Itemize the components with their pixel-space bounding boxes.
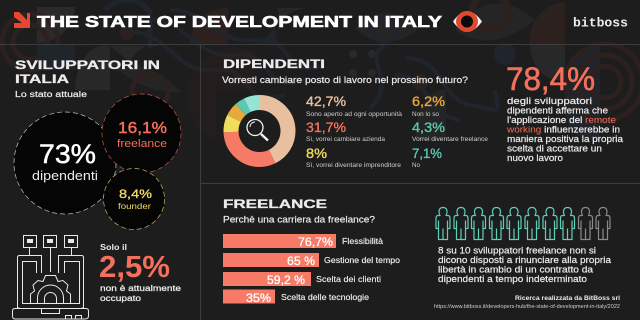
stat: 78,4%: 78,4% — [506, 61, 595, 97]
legend: 42,7% — [306, 93, 403, 118]
legend: 4,3%: 4,3% — [412, 119, 445, 135]
circle: dipendenti 73%: dipendenti — [32, 169, 98, 183]
heading: sviluppatori — [15, 58, 160, 86]
legend: 4,3%: Vorrei diventare freelance — [412, 137, 489, 143]
stat: 2,5% non occupato: occupato — [100, 293, 141, 303]
legend: 31,7%: Sì, vorrei cambiare azienda — [306, 137, 386, 143]
bar: scelta delle tecnologie: 35% — [246, 291, 271, 305]
text block: remote working: l'applicazione del remote — [507, 115, 616, 126]
bar: scelta dei clienti — [223, 272, 381, 287]
bar: gestione del tempo: 65 % — [287, 254, 315, 268]
bar: gestione del tempo: Gestione del tempo — [324, 255, 400, 265]
bar: scelta dei clienti: Scelta dei clienti — [316, 274, 381, 284]
question: Vorresti cambiare posto di lavoro nel prossimo futuro? — [222, 75, 468, 86]
text block: remote working: working influenzerebbe in — [506, 124, 620, 136]
stat: 2,5% non occupato: 2,5% — [99, 249, 170, 284]
legend: 4,3% — [412, 119, 489, 143]
circle: dipendenti 73% — [14, 112, 116, 214]
text block: 8 su 10 — [438, 246, 612, 285]
title: THE STATE OF DEVELOPMENT IN ITALY — [37, 14, 443, 31]
text block: remote working: scelta di accettare un — [507, 144, 602, 154]
subheading: Lo stato attuale — [15, 90, 88, 99]
circle: founder 8,4%: founder — [118, 201, 151, 211]
credit: https://www.bitboss.it/developers-hub/the-state-of-development-in-italy/2022 — [434, 304, 620, 310]
bar: flessibilità: 76,7% — [298, 235, 333, 249]
circle: freelance 16,1% — [102, 94, 181, 173]
text block: 8 su 10: 8 su 10 sviluppatori freelance non si — [438, 246, 596, 257]
legend: 8%: Sì, vorrei diventare imprenditore — [306, 163, 402, 169]
legend: 8%: 8% — [306, 145, 327, 161]
bar chart — [223, 234, 400, 305]
pictogram: 8 su 10 — [436, 208, 610, 240]
panel: freelance — [223, 197, 620, 310]
icon: laptop with gear — [12, 236, 88, 319]
bar: flessibilità — [223, 234, 383, 249]
panel: dipendenti — [222, 57, 624, 169]
heading: dipendenti: DIPENDENTI — [223, 57, 325, 71]
background pattern — [2, 0, 640, 140]
stat: 2,5% non occupato: non è attualmente — [100, 283, 181, 293]
heading: freelance: FREELANCE — [223, 197, 327, 211]
circle: founder 8,4% — [104, 168, 164, 230]
legend: 6,2% — [412, 93, 445, 118]
icon: magnifier — [247, 120, 268, 140]
text block: 8 su 10: dicono disposti a rinunciare alla propria — [438, 255, 612, 266]
heading: sviluppatori: ITALIA — [15, 72, 69, 86]
legend: 42,7%: Sono aperto ad ogni opportunità — [306, 112, 403, 118]
legend: 6,2%: Non lo so — [412, 112, 440, 118]
circle: dipendenti 73%: 73% — [39, 139, 96, 169]
text block: remote working: degli sviluppatori — [507, 96, 592, 107]
stat: 2,5% non occupato — [99, 243, 181, 303]
stat: 2,5% non occupato: Solo il — [100, 243, 127, 252]
legend: 42,7%: 42,7% — [306, 93, 346, 109]
circle: freelance 16,1%: freelance — [117, 138, 167, 150]
icon: eye logo — [453, 11, 482, 32]
bar: gestione del tempo — [223, 253, 400, 268]
legend: 7,1%: 7,1% — [412, 145, 442, 161]
text block: remote working — [506, 96, 624, 164]
legend: 7,1%: No — [412, 163, 421, 169]
legend: 31,7% — [306, 119, 386, 143]
legend: 6,2%: 6,2% — [412, 93, 445, 109]
bar: scelta dei clienti: 59,2 % — [267, 273, 305, 287]
bar: scelta delle tecnologie: Scelta delle tecnologie — [281, 292, 369, 302]
heading: sviluppatori: SVILUPPATORI IN — [15, 58, 160, 72]
panel: sviluppatori in Italia — [12, 58, 181, 319]
brand: bitboss: bitboss — [573, 16, 628, 30]
icon: red arrow — [14, 12, 30, 28]
bar: scelta delle tecnologie — [223, 290, 369, 305]
circle: founder 8,4%: 8,4% — [119, 187, 152, 201]
text block: 8 su 10: dipendenti a tempo indeterminato — [438, 274, 587, 285]
text block: 8 su 10: libertà in cambio di un contratto da — [438, 265, 594, 276]
credit: Ricerca realizzata da BitBoss srl — [515, 295, 620, 302]
circle: freelance 16,1%: 16,1% — [118, 120, 167, 137]
credit — [434, 295, 620, 310]
legend: 8% — [306, 145, 402, 169]
legend: 31,7%: 31,7% — [306, 119, 346, 135]
text block: remote working: nuovo lavoro — [507, 153, 563, 164]
bar: flessibilità: Flessibilità — [342, 236, 383, 246]
question: Perchè una carriera da freelance? — [223, 214, 375, 226]
donut chart — [231, 102, 288, 160]
text block: remote working: dipendenti afferma che — [507, 106, 608, 116]
legend: 7,1% — [412, 145, 442, 169]
text block: remote working: maniera positiva la propria — [507, 134, 624, 145]
